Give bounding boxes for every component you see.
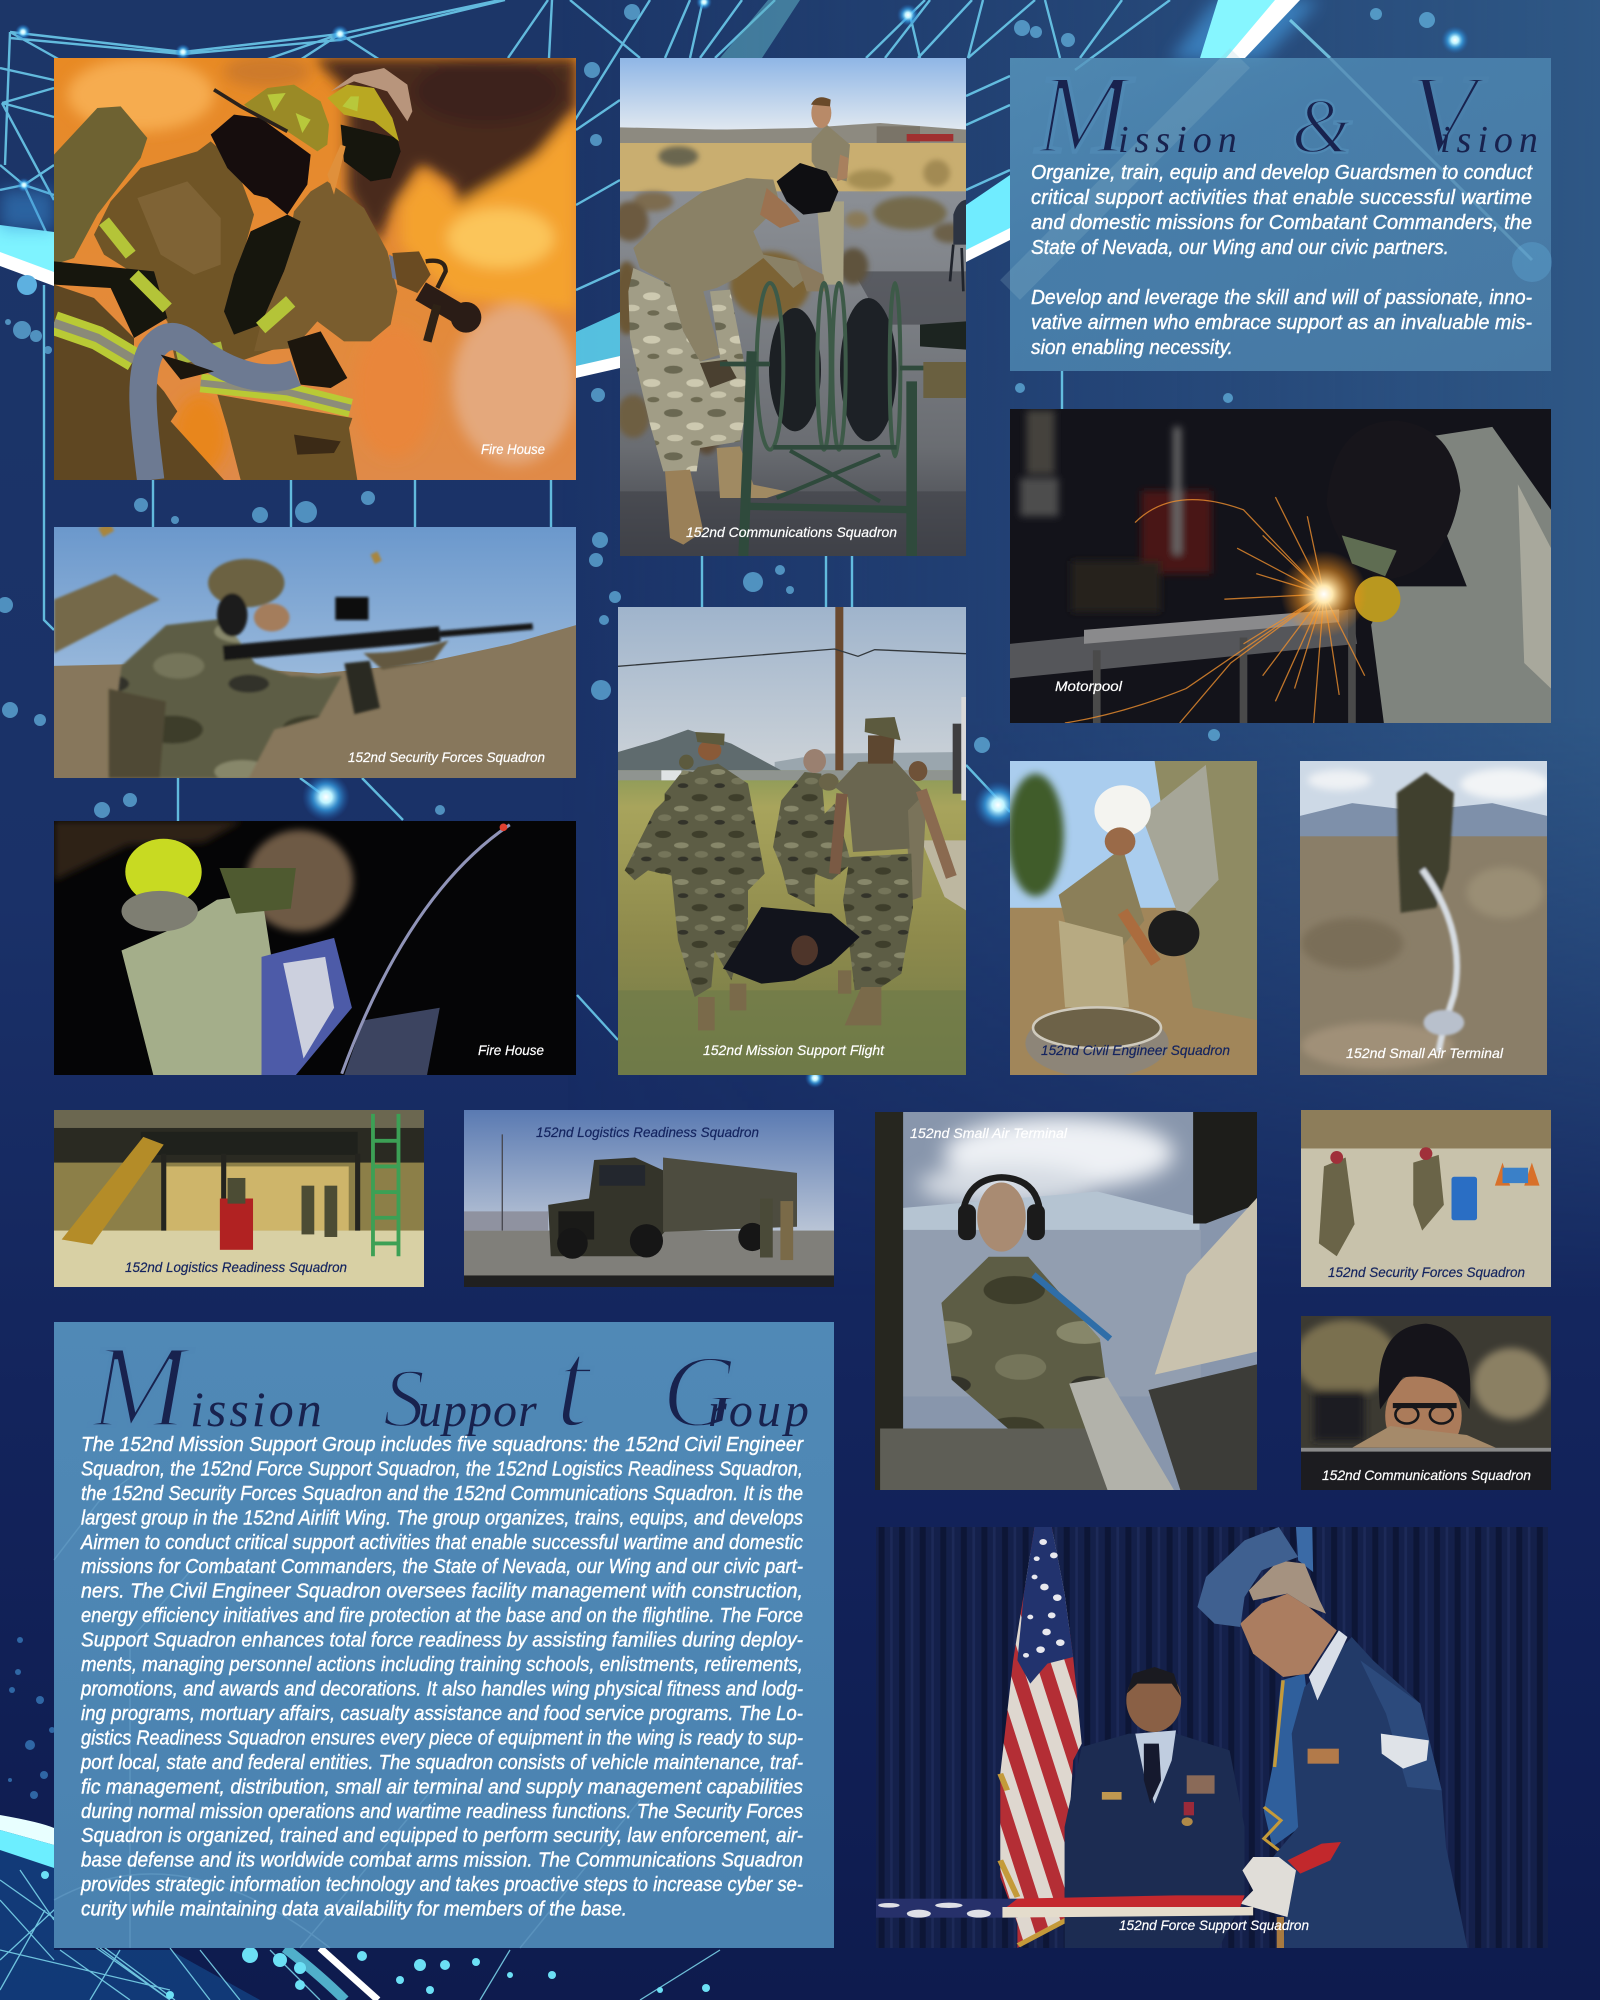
caption: 152nd Small Air Terminal — [1346, 1045, 1504, 1061]
glow band centre — [576, 312, 620, 378]
heading: mission support group: S — [362, 1352, 425, 1445]
photo: security forces range — [1301, 1110, 1551, 1287]
far soldier — [817, 201, 844, 285]
heading: mission and vision: M — [1034, 53, 1135, 177]
body text: mission and vision: vative airmen who embrace support as an invaluable mis- — [1031, 312, 1532, 334]
teal band top — [720, 0, 800, 58]
photo: motorpool welder — [1010, 409, 1551, 723]
heading: mission support group: roup — [708, 1384, 813, 1437]
body text: mission support group: fic management, distribution, small air terminal and supply management capabilities — [81, 1776, 803, 1798]
body text: mission and vision: State of Nevada, our Wing and our civic partners. — [1031, 237, 1449, 259]
body text: mission support group: provides strategic information technology and takes proactive steps to increase cyber se- — [80, 1874, 803, 1896]
blue flag — [1264, 1674, 1307, 1847]
body text: mission support group: promotions, and awards and decorations. It also handles wing physical fitness and lodg- — [80, 1678, 803, 1700]
body text: mission support group: gistics Readiness Squadron ensures every piece of equipment in the wing is ready to sup- — [81, 1727, 803, 1749]
heading: mission and vision: & — [1272, 82, 1352, 169]
body text: mission support group: ments, managing personnel actions including training schools, enlistments, retirements, — [81, 1654, 803, 1676]
main soldier — [628, 268, 748, 471]
caption: Fire House — [481, 441, 545, 457]
glow nodes — [15, 0, 1469, 1088]
caption: 152nd Communications Squadron — [686, 524, 897, 540]
caption: 152nd Logistics Readiness Squadron — [536, 1124, 759, 1140]
body text: mission and vision — [1031, 162, 1533, 359]
body text: mission support group: Support Squadron enhances total force readiness by assisting families during deploy- — [81, 1630, 803, 1652]
body text: mission support group: The 152nd Mission Support Group includes five squadrons: the 152nd Civil Engineer — [81, 1434, 804, 1456]
photo: mission support flight stretcher carry — [618, 607, 966, 1075]
body text: mission and vision: critical support activities that enable successful wartime — [1031, 187, 1532, 209]
heading: mission support group: t — [555, 1315, 593, 1454]
body text: mission and vision: and domestic missions for Combatant Commanders, the — [1031, 212, 1532, 234]
photo: security forces rifleman — [54, 522, 576, 778]
photo: force support squadron flag ceremony — [876, 1527, 1548, 1948]
bubbles — [0, 4, 1435, 818]
right airman — [1197, 1527, 1467, 1948]
heading: mission and vision: ision — [1440, 119, 1544, 161]
glow band left — [0, 190, 54, 295]
body text: mission support group: missions for Combatant Commanders, the State of Nevada, our Wing and our civic part- — [81, 1556, 803, 1578]
caption: Motorpool — [1055, 678, 1123, 694]
caption: 152nd Civil Engineer Squadron — [1041, 1042, 1230, 1058]
soldiers — [905, 787, 926, 900]
heading: mission and vision: ission — [1118, 119, 1243, 161]
centre airman — [1065, 1667, 1245, 1948]
caption: 152nd Mission Support Flight — [703, 1042, 885, 1058]
photo: civil engineer squadron — [1007, 761, 1257, 1078]
glow band right — [966, 175, 1010, 262]
heading: mission support group: uppor — [418, 1384, 538, 1437]
body text: mission support group: curity while maintaining data availability for members of the base. — [81, 1899, 627, 1921]
body text: mission and vision: sion enabling necessity. — [1031, 337, 1233, 359]
caption: 152nd Small Air Terminal — [910, 1125, 1068, 1141]
caption: 152nd Security Forces Squadron — [348, 749, 545, 765]
body text: mission support group: ners. The Civil Engineer Squadron oversees facility management with construction, — [81, 1581, 803, 1603]
body text: mission support group: Squadron is organized, trained and equipped to perform security, law enforcement, air- — [81, 1825, 803, 1847]
body text: mission support group: port local, state and federal entities. The squadron consists of vehicle maintenance, traf- — [80, 1752, 803, 1774]
body text: mission support group: Airmen to conduct critical support activities that enable successful wartime and domestic — [80, 1532, 803, 1554]
cable reels — [769, 308, 821, 431]
body text: mission support group — [80, 1434, 804, 1921]
heading: mission support group: M — [88, 1321, 194, 1452]
photo: small air terminal loader — [875, 1112, 1257, 1490]
body text: mission and vision: Develop and leverage the skill and will of passionate, inno- — [1031, 287, 1532, 309]
panel: mission and vision — [1010, 53, 1552, 371]
heading: mission and vision: V — [1380, 53, 1488, 177]
body text: mission support group: largest group in the 152nd Airlift Wing. The group organizes, trains, equips, and develops — [81, 1507, 803, 1529]
caption: 152nd Security Forces Squadron — [1328, 1264, 1525, 1280]
heading: mission support group: ission — [190, 1381, 325, 1437]
panel: mission support group — [54, 1315, 834, 1948]
body text: mission and vision: Organize, train, equip and develop Guardsmen to conduct — [1031, 162, 1533, 184]
photo: communications squadron cable reels — [612, 58, 967, 556]
body text: mission support group: base defense and its worldwide combat arms mission. The Communications Squadron — [81, 1850, 803, 1872]
caption: 152nd Logistics Readiness Squadron — [125, 1259, 347, 1275]
bubbles dark left — [8, 1637, 55, 1799]
photo: logistics readiness fuel truck — [464, 1110, 834, 1287]
body text: mission support group: the 152nd Security Forces Squadron and the 152nd Communications Squadron. It is the — [81, 1483, 803, 1505]
body text: mission support group: during normal mission operations and wartime readiness functions. The Security Forces — [81, 1801, 803, 1823]
body text: mission support group: ing programs, mortuary affairs, casualty assistance and food service programs. The Lo- — [81, 1703, 803, 1725]
photo: small air terminal field — [1300, 761, 1550, 1075]
folded flag — [876, 1842, 1341, 1948]
photo: fire house night scene — [54, 821, 576, 1075]
caption: 152nd Communications Squadron — [1322, 1467, 1531, 1483]
bottom-left network — [0, 1815, 720, 2000]
caption: 152nd Force Support Squadron — [1119, 1917, 1309, 1933]
caption: Fire House — [478, 1042, 544, 1058]
body text: mission support group: Squadron, the 152nd Force Support Squadron, the 152nd Logistics Readiness Squadron, — [81, 1458, 803, 1480]
network lines top — [0, 0, 1170, 1040]
heading: mission support group: G — [636, 1334, 737, 1449]
glow top right — [1170, 0, 1330, 60]
photo: communications squadron operator — [1295, 1316, 1551, 1490]
body text: mission support group: energy efficiency initiatives and fire protection at the base and on the flightline. The Force — [81, 1605, 803, 1627]
us flag — [1000, 1527, 1082, 1948]
photo: fire house firefighters — [54, 55, 576, 480]
photo: logistics readiness warehouse — [54, 1110, 424, 1287]
